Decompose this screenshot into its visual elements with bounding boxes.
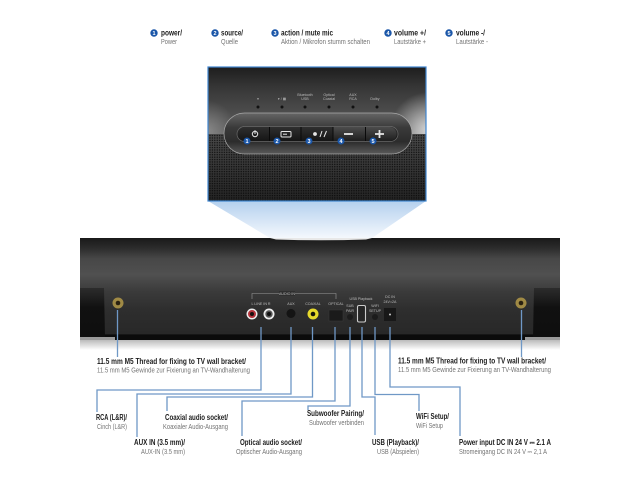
callout: subwoofer: Subwoofer verbinden bbox=[309, 418, 364, 427]
status indicators: USB bbox=[301, 97, 309, 101]
callout: coaxial: Koaxialer Audio-Ausgang bbox=[163, 422, 228, 431]
callout: right thread: 11.5 mm M5 Gewinde zur Fixierung an TV-Wandhalterung bbox=[398, 365, 551, 374]
optical socket bbox=[328, 302, 344, 321]
audio in bracket bbox=[252, 291, 336, 299]
mounting screw right bbox=[516, 298, 526, 308]
status indicators: Coaxial bbox=[323, 97, 335, 101]
legend item 1: power bbox=[150, 28, 183, 46]
status indicators: Bluetooth bbox=[297, 93, 313, 97]
WiFi setup button: WIFI bbox=[371, 304, 379, 308]
callout: right thread bbox=[398, 356, 551, 374]
RCA sockets bbox=[246, 302, 274, 320]
legend item 3: action / mute mic bbox=[271, 28, 370, 46]
status indicators: ▾ bbox=[257, 97, 259, 101]
optical socket: OPTICAL bbox=[328, 302, 344, 306]
legend item 2: source bbox=[211, 28, 244, 46]
subwoofer pair button: PAIR bbox=[346, 309, 354, 313]
legend item 4: volume + bbox=[384, 28, 427, 46]
legend item 2: source: Quelle bbox=[221, 37, 238, 46]
legend item 3: action / mute mic: action / mute mic bbox=[281, 28, 333, 38]
legend item 1: power: Power bbox=[161, 37, 177, 46]
callout: optical: Optischer Audio-Ausgang bbox=[236, 447, 302, 456]
button number badges: 1 bbox=[245, 139, 249, 145]
status indicators: Dolby bbox=[370, 97, 380, 101]
callout: power input: Stromeingang DC IN 24 V ⎓ 2,1 A bbox=[459, 447, 547, 456]
callout: AUX: AUX IN (3.5 mm)/ bbox=[134, 438, 186, 447]
subwoofer pair button: SUB bbox=[346, 304, 354, 308]
callout: coaxial: Coaxial audio socket/ bbox=[165, 413, 229, 422]
callout: left thread: 11.5 mm M5 Gewinde zur Fixierung an TV-Wandhalterung bbox=[97, 366, 250, 374]
legend: button functions bbox=[150, 28, 489, 46]
soundbar shadow bbox=[80, 340, 560, 350]
legend item 4: volume +: volume +/ bbox=[394, 28, 427, 38]
DC in socket: DC IN bbox=[385, 295, 395, 299]
legend item 5: volume -: 5 bbox=[447, 31, 451, 37]
callout: WiFi bbox=[416, 412, 450, 430]
button number badges: 4 bbox=[339, 139, 343, 145]
panel: top control close-up bbox=[208, 67, 426, 201]
subwoofer pair button bbox=[346, 304, 354, 320]
callout: power input bbox=[459, 438, 551, 456]
callout: AUX bbox=[134, 438, 186, 456]
status indicators: AUX bbox=[349, 93, 357, 97]
WiFi setup button bbox=[369, 304, 382, 320]
legend item 2: source: 2 bbox=[213, 31, 217, 37]
legend item 3: action / mute mic: 3 bbox=[273, 31, 277, 37]
callout: WiFi: WiFi Setup/ bbox=[416, 412, 450, 421]
callout: USB: USB (Abspielen) bbox=[377, 447, 419, 456]
callout: power input: Power input DC IN 24 V ⎓ 2.1 A bbox=[459, 438, 551, 447]
button number badges: 2 bbox=[275, 139, 279, 145]
callout: right thread: 11.5 mm M5 Thread for fixing to TV wall bracket/ bbox=[398, 356, 547, 366]
DC in socket: 24V=2A bbox=[384, 300, 397, 304]
status indicators: RCA bbox=[349, 97, 357, 101]
callout: AUX: AUX-IN (3.5 mm) bbox=[141, 447, 185, 456]
USB port bbox=[350, 297, 373, 322]
callout: optical: Optical audio socket/ bbox=[240, 438, 303, 447]
legend item 2: source: source/ bbox=[221, 28, 244, 38]
callout: RCA: RCA (L&R)/ bbox=[96, 413, 128, 422]
callout: left thread bbox=[97, 357, 250, 374]
DC in socket bbox=[384, 295, 397, 321]
control pill bbox=[224, 113, 412, 154]
status indicators: Optical bbox=[323, 93, 335, 97]
soundbar rear view bbox=[80, 238, 560, 340]
WiFi setup button: SETUP bbox=[369, 309, 382, 313]
coaxial socket bbox=[305, 302, 321, 320]
legend item 1: power: power/ bbox=[161, 28, 183, 38]
callout: coaxial bbox=[163, 413, 229, 431]
RCA sockets: L LINE IN R bbox=[251, 302, 271, 306]
legend item 5: volume -: Lautstärke - bbox=[456, 37, 489, 46]
AUX socket bbox=[286, 302, 296, 318]
legend item 1: power: 1 bbox=[152, 31, 156, 37]
callout: RCA: Cinch (L&R) bbox=[97, 422, 127, 431]
legend item 4: volume +: 4 bbox=[386, 31, 390, 37]
legend item 5: volume -: volume -/ bbox=[456, 28, 486, 38]
callout: subwoofer: Subwoofer Pairing/ bbox=[307, 409, 365, 418]
audio in bracket: AUDIO IN bbox=[279, 292, 295, 296]
callout: optical bbox=[236, 438, 303, 456]
callout: RCA bbox=[96, 413, 128, 431]
legend item 4: volume +: Lautstärke + bbox=[394, 37, 426, 46]
USB port: USB Playback bbox=[350, 297, 373, 301]
mounting screw left bbox=[112, 298, 124, 308]
callout: USB: USB (Playback)/ bbox=[372, 438, 420, 447]
status indicators: ▾ / ▦ bbox=[278, 97, 287, 101]
button number badges bbox=[244, 138, 376, 145]
button number badges: 5 bbox=[371, 139, 375, 145]
callout: left thread: 11.5 mm M5 Thread for fixing to TV wall bracket/ bbox=[97, 357, 247, 366]
coaxial socket: COAXIAL bbox=[305, 302, 321, 306]
callout: subwoofer bbox=[307, 409, 365, 427]
button number badges: 3 bbox=[307, 139, 311, 145]
legend item 5: volume - bbox=[445, 28, 489, 46]
leader lines bbox=[97, 310, 522, 437]
legend item 3: action / mute mic: Aktion / Mikrofon stumm schalten bbox=[281, 37, 370, 46]
status indicators bbox=[256, 93, 380, 108]
zoom cone linking panel to soundbar bbox=[208, 201, 426, 238]
AUX socket: AUX bbox=[287, 302, 295, 306]
callout: WiFi: WiFi Setup bbox=[416, 421, 443, 430]
button icons bbox=[252, 130, 384, 138]
callout: USB bbox=[372, 438, 420, 456]
